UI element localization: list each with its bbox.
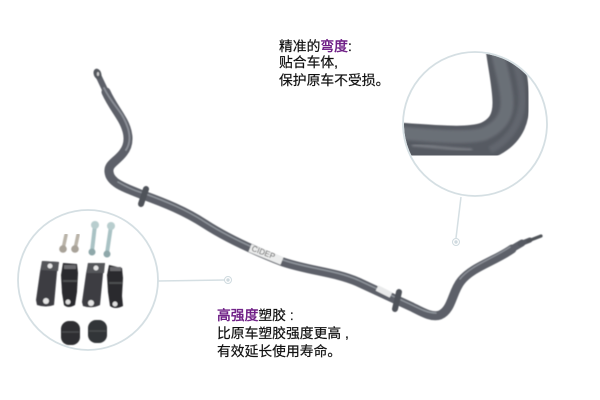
callout circle: parts kit: [18, 210, 232, 350]
bend closeup: [398, 40, 522, 150]
callout top text: 贴合车体,: [279, 54, 338, 70]
callout bottom text: 比原车塑胶强度更高 ,: [217, 325, 349, 341]
leader line top: [456, 197, 461, 238]
label: small sticker: [377, 288, 391, 295]
bushing left: [141, 189, 146, 204]
callout top text: 精准的弯度:: [279, 38, 352, 54]
long bolts: [88, 221, 115, 258]
callout bottom text: 高强度塑胶 :: [217, 307, 294, 323]
bushing right: [395, 292, 399, 309]
leader dot left: [224, 276, 232, 284]
short bolts: [59, 235, 79, 253]
brackets: [36, 261, 105, 307]
icon: bar end eyelet: [92, 68, 103, 80]
rubber bushings: [61, 320, 107, 345]
label: brand sticker: CIDEP: [250, 244, 276, 261]
callout circle: bend detail: [398, 40, 547, 246]
sway bar: [92, 68, 541, 316]
infographic canvas: [17, 38, 548, 358]
callout top text: 保护原车不受损。: [279, 72, 389, 88]
callout top text: [279, 38, 389, 88]
leader dot top: [452, 238, 460, 246]
callout bottom text: [217, 307, 349, 359]
callout bottom text: 有效延长使用寿命。: [217, 343, 341, 359]
leader line left: [158, 280, 225, 281]
rubber mounts: [61, 263, 123, 308]
